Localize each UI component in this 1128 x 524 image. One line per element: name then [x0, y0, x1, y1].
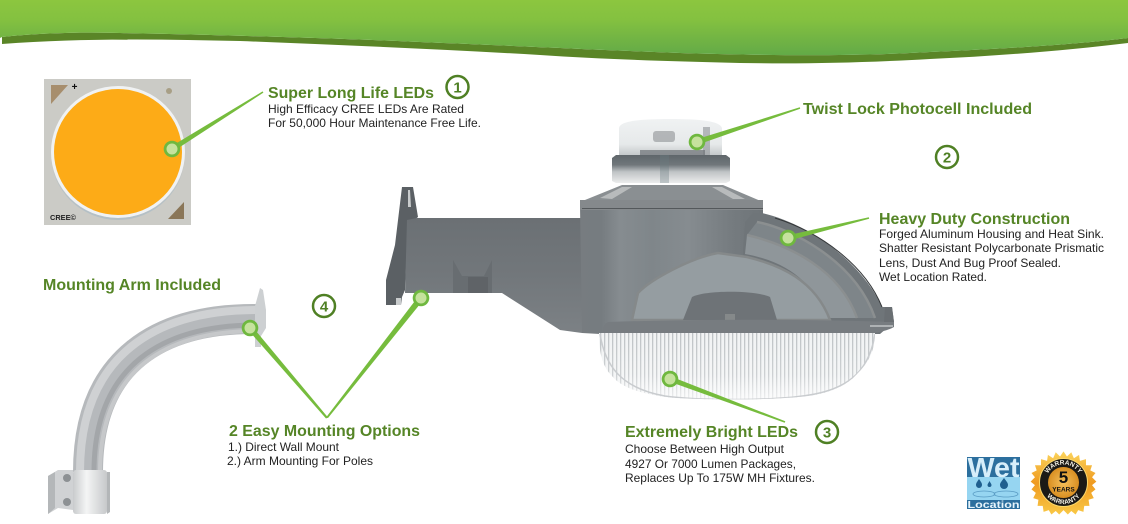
construction text: Forged Aluminum Housing and Heat Sink. — [879, 227, 1104, 241]
mounting arm heading: Mounting Arm Included — [43, 277, 221, 294]
lamp photo — [386, 119, 894, 404]
number badge 4 — [313, 295, 335, 317]
top cone — [580, 185, 763, 206]
header banner — [0, 0, 1128, 63]
mounting options text: 1.) Direct Wall Mount — [228, 440, 340, 454]
prismatic lens — [598, 332, 878, 404]
lens boss — [683, 292, 777, 320]
warranty seal: WARRANTY — [1048, 493, 1079, 504]
wet location badge: Location — [968, 499, 1020, 511]
warranty seal: YEARS — [1052, 486, 1075, 494]
number badge 4: 4 — [320, 298, 329, 316]
LED chip photo — [44, 79, 191, 225]
mounting options text: 2 Easy Mounting Options — [229, 423, 420, 440]
cap band — [580, 200, 763, 210]
feature 2 text: Twist Lock Photocell Included — [803, 101, 1032, 118]
callout line: super long life — [164, 91, 263, 157]
wet location badge: Wet — [968, 452, 1020, 483]
construction text: Heavy Duty Construction — [879, 211, 1070, 228]
fin base — [743, 213, 882, 322]
feature 3 text — [625, 424, 815, 485]
callout line: construction — [780, 217, 869, 246]
photocell collar — [612, 155, 730, 183]
warranty seal: WARRANTY — [1044, 460, 1083, 473]
feature 1 text — [268, 85, 481, 130]
callout line: photocell — [689, 107, 800, 150]
construction text: Shatter Resistant Polycarbonate Prismatic — [879, 241, 1104, 255]
feature 3 text: Extremely Bright LEDs — [625, 424, 798, 441]
mounting arm photo — [48, 288, 266, 514]
warranty seal — [1030, 452, 1096, 514]
construction text: Lens, Dust And Bug Proof Sealed. — [879, 256, 1061, 270]
number badge 3: 3 — [823, 424, 831, 442]
number badge 3 — [816, 421, 838, 443]
number badge 2: 2 — [943, 150, 951, 166]
bracket notch — [453, 260, 492, 293]
feature 1 text: Super Long Life LEDs — [268, 85, 434, 102]
construction text: Wet Location Rated. — [879, 270, 987, 284]
callout line: bright LEDs — [662, 371, 785, 423]
LED chip photo: + — [72, 82, 78, 93]
housing — [580, 206, 894, 334]
feature 1 text: High Efficacy CREE LEDs Are Rated — [268, 102, 464, 116]
mounting options text — [227, 423, 420, 468]
feature 3 text: Choose Between High Output — [625, 442, 785, 456]
arm tube — [405, 218, 582, 333]
LED chip photo: CREE© — [50, 214, 77, 222]
feature 1 text: For 50,000 Hour Maintenance Free Life. — [268, 116, 481, 130]
feature 3 text: Replaces Up To 175W MH Fixtures. — [625, 471, 815, 485]
fin outer band — [747, 222, 875, 318]
dome panel — [632, 253, 830, 320]
rim — [603, 320, 894, 334]
mounting options text: 2.) Arm Mounting For Poles — [227, 454, 373, 468]
construction text — [879, 211, 1104, 284]
fin inner panel — [745, 235, 857, 318]
photocell dome — [619, 119, 722, 155]
number badge 1: 1 — [453, 80, 462, 96]
feature 3 text: 4927 Or 7000 Lumen Packages, — [625, 457, 796, 471]
warranty seal: 5 — [1059, 468, 1068, 487]
number badge 2 — [936, 146, 958, 168]
number badge 1 — [446, 76, 468, 98]
callout lines: mounting options — [242, 290, 429, 418]
wet location badge — [967, 452, 1020, 511]
wall plate — [386, 187, 418, 305]
